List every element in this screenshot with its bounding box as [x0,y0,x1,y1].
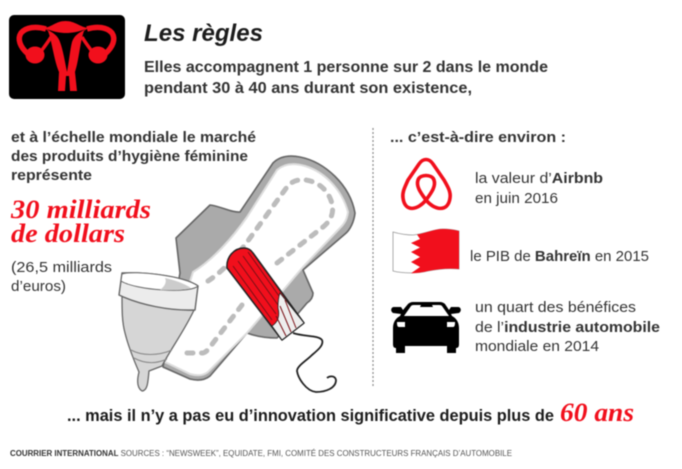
right heading: ... c’est-à-dire environ : [390,130,566,146]
left text: market description: et à l’échelle mondiale le marché [11,130,256,146]
Bahrain text: le PIB de Bahreïn en 2015 [470,249,649,265]
key figure: 30 milliards de dollars: de dollars [11,219,125,248]
auto industry text: de l’industrie automobile [475,320,660,336]
intro text: pendant 30 à 40 ans durant son existence, [144,80,472,97]
key figure: 30 milliards de dollars [10,195,151,248]
icon: Bahrain flag [393,229,459,273]
euro conversion [11,260,112,295]
title: Les règles [144,20,263,47]
left text: market description: des produits d’hygiène féminine [11,149,248,165]
key figure: 30 milliards de dollars: 30 milliards [10,195,151,224]
Airbnb text: en juin 2016 [475,191,558,207]
euro conversion: d’euros) [11,279,66,295]
conclusion: ... mais il n’y a pas eu d’innovation significative depuis plus de [67,406,554,425]
left text: market description [11,130,256,184]
auto industry text: un quart des bénéfices [475,300,636,316]
icon: car [391,302,461,353]
icon: uterus on black panel [9,15,125,99]
illustration: menstrual cup [119,273,198,391]
conclusion: 60 ans [560,398,634,427]
auto industry text: mondiale en 2014 [475,339,599,355]
left text: market description: représente [11,168,92,184]
illustration: sanitary pad [163,156,355,380]
intro text: Elles accompagnent 1 personne sur 2 dans le monde [144,59,548,76]
Airbnb text [475,171,603,207]
footer: sources: COURRIER INTERNATIONAL SOURCES : “NEWSWEEK”, EQUIDATE, FMI, COMITÉ DES CONSTRUCTEURS FRANÇAIS D’AUTOMOBILE [10,448,512,458]
auto industry text [475,300,660,355]
dotted divider [372,128,374,388]
icon: Airbnb logo [403,160,450,208]
intro text [144,59,548,97]
conclusion [67,398,634,427]
illustration: tampon [227,248,336,392]
euro conversion: (26,5 milliards [11,260,112,276]
Airbnb text: la valeur d’ Airbnb [475,171,603,187]
